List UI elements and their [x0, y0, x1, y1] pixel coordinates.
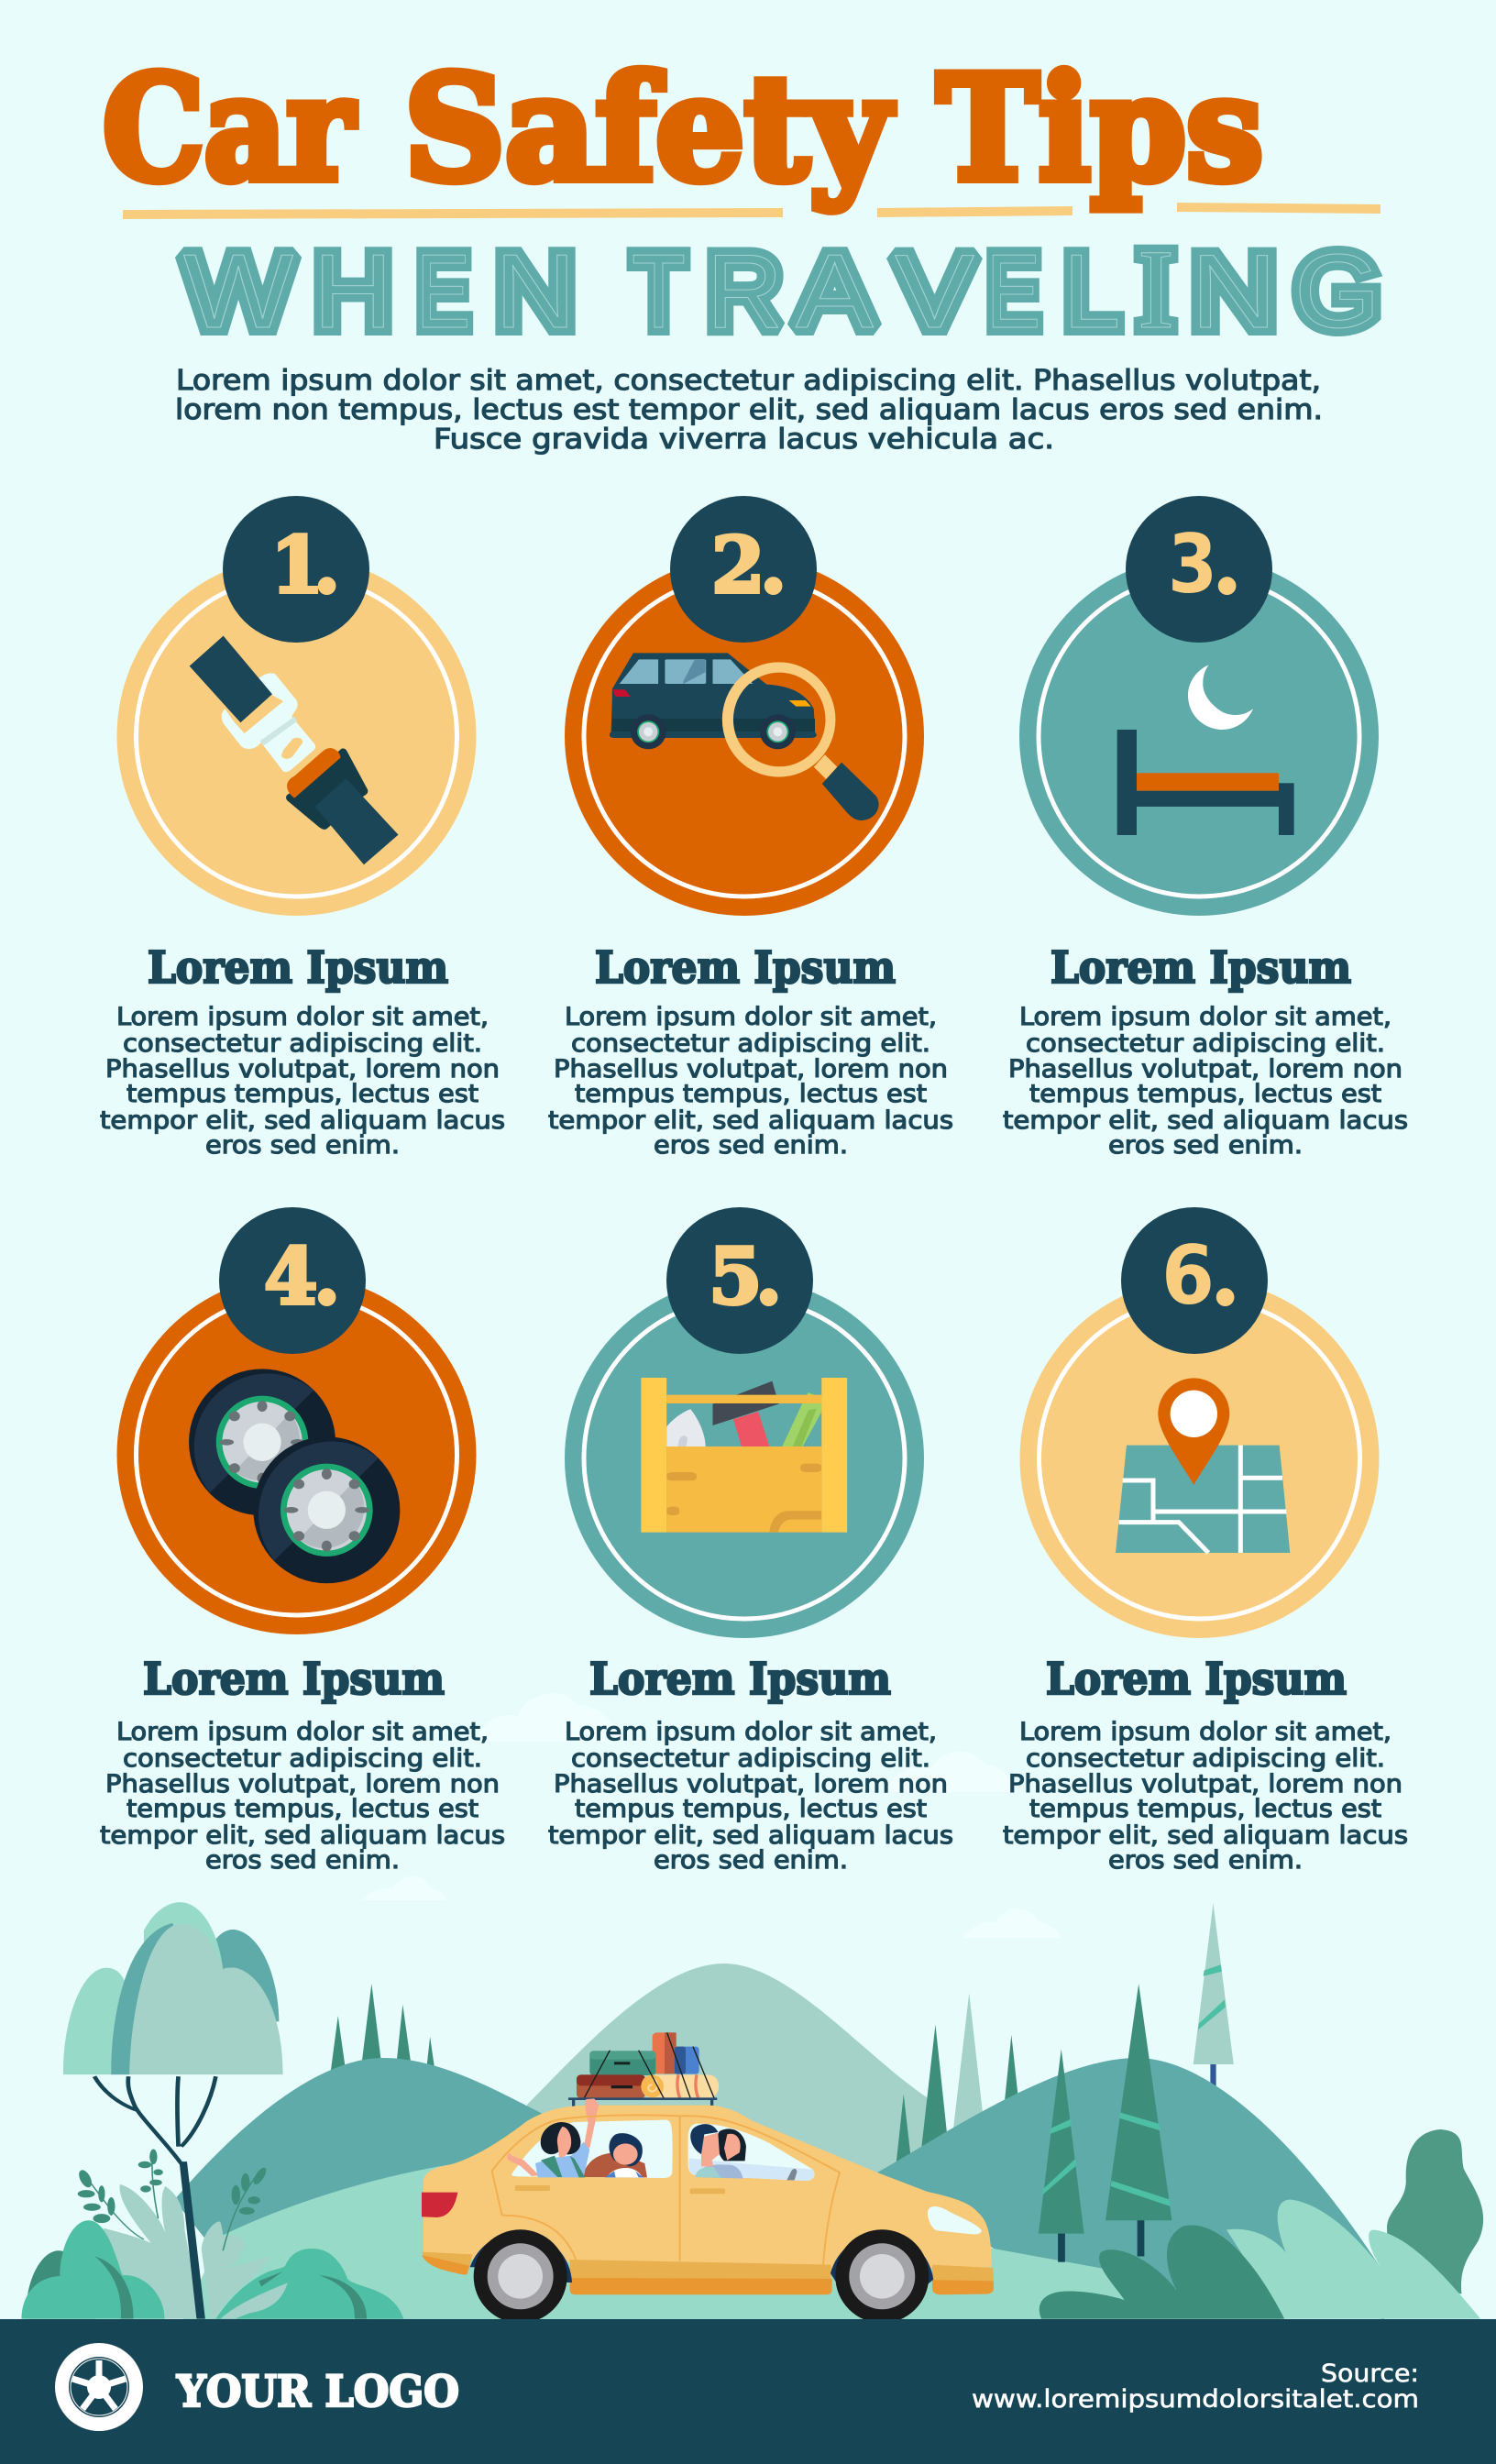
body text 5: Phasellus volutpat, lorem non: [554, 1770, 948, 1798]
background clouds: [362, 1693, 1061, 1938]
subtitle: WHEN TRAVELING: V: [895, 234, 974, 350]
body text 6: tempus tempus, lectus est: [1029, 1795, 1381, 1823]
rear wheel: [474, 2229, 567, 2323]
body text 3: consectetur adipiscing elit.: [1026, 1029, 1385, 1058]
logo wheel icon: [55, 2343, 143, 2431]
body text 6: Phasellus volutpat, lorem non: [1008, 1770, 1402, 1798]
subtitle: WHEN TRAVELING: L: [1063, 234, 1120, 350]
subtitle: WHEN TRAVELING: W: [183, 234, 293, 350]
intro text: [175, 365, 1323, 456]
number badge 6: [1121, 1207, 1268, 1354]
striped trees right: [1039, 1984, 1480, 2319]
body text 1: eros sed enim.: [205, 1131, 400, 1160]
heading 6: Lorem Ipsum: [1046, 1654, 1347, 1705]
subtitle: WHEN TRAVELING: N: [1191, 234, 1277, 350]
number badge 3: 3: [1168, 517, 1217, 611]
number badge 4: [219, 1207, 366, 1354]
body text 3: Lorem ipsum dolor sit amet,: [1019, 1003, 1392, 1031]
body text 2: [548, 1003, 953, 1160]
car with family: [422, 2032, 994, 2323]
car body: [424, 2106, 992, 2271]
heading 1: Lorem Ipsum: [148, 942, 448, 994]
heading 3: Lorem Ipsum: [1050, 942, 1351, 994]
subtitle: WHEN TRAVELING: H: [314, 234, 392, 350]
right hill: [877, 2058, 1384, 2319]
panel: tip 2 car check: [548, 496, 953, 1160]
body text 3: Phasellus volutpat, lorem non: [1008, 1055, 1402, 1084]
body text 4: tempor elit, sed aliquam lacus: [100, 1821, 505, 1850]
number badge 5: .: [755, 1231, 782, 1322]
front wheel: [835, 2229, 929, 2323]
body text 5: [548, 1718, 953, 1875]
heading 2: Lorem Ipsum: [595, 942, 896, 994]
title: Car Safety Tips: Tips: [937, 45, 1263, 214]
headlight: [928, 2206, 982, 2234]
door and trim lines: [492, 2115, 840, 2266]
subtitle: WHEN TRAVELING: A: [796, 234, 874, 350]
heading 5: Lorem Ipsum: [589, 1654, 891, 1705]
number badge 1: 1: [270, 520, 324, 610]
number badge 1: [223, 496, 369, 643]
subtitle: WHEN TRAVELING: H: [314, 234, 392, 350]
body text 2: Lorem ipsum dolor sit amet,: [565, 1003, 937, 1031]
body text 2: consectetur adipiscing elit.: [571, 1029, 930, 1058]
icon: bed and moon: [1117, 665, 1294, 835]
body text 5: tempor elit, sed aliquam lacus: [548, 1821, 953, 1850]
body text 6: Lorem ipsum dolor sit amet,: [1019, 1718, 1392, 1746]
footer bar: [0, 2319, 1496, 2464]
source text: [972, 2360, 1419, 2414]
body text 1: Phasellus volutpat, lorem non: [105, 1055, 500, 1084]
subtitle: WHEN TRAVELING: L: [1063, 234, 1120, 350]
subtitle: WHEN TRAVELING: W: [183, 234, 293, 350]
subtitle: WHEN TRAVELING: E: [416, 234, 470, 350]
subtitle: WHEN TRAVELING: T: [632, 234, 686, 350]
number badge 6: .: [1212, 1231, 1238, 1322]
intro text: Lorem ipsum dolor sit amet, consectetur adipiscing elit. Phasellus volutpat,: [176, 365, 1321, 397]
subtitle: WHEN TRAVELING: G: [1294, 234, 1380, 350]
source text: www.loremipsumdolorsitalet.com: [972, 2385, 1419, 2414]
number badge 4: 4: [264, 1231, 317, 1322]
left hill: [174, 2058, 550, 2246]
body text 4: [100, 1718, 505, 1875]
body text 6: [1003, 1718, 1408, 1875]
number badge 5: 5: [709, 1231, 762, 1322]
family in rear window: [507, 2098, 647, 2177]
subtitle: WHEN TRAVELING: E: [986, 234, 1040, 350]
body text 1: Lorem ipsum dolor sit amet,: [116, 1003, 489, 1031]
wheel arches: [470, 2232, 572, 2282]
title: Car Safety Tips: Car: [103, 45, 356, 214]
background conifers right: [896, 1903, 1234, 2169]
icon: car and magnifier: [610, 653, 879, 820]
body text 4: Lorem ipsum dolor sit amet,: [116, 1718, 489, 1746]
sills and bumpers: [570, 2260, 831, 2280]
subtitle: WHEN TRAVELING: V: [895, 234, 974, 350]
subtitle: WHEN TRAVELING: T: [632, 234, 686, 350]
windows: [512, 2120, 673, 2178]
number badge 2: 2: [711, 520, 764, 610]
subtitle: WHEN TRAVELING: R: [707, 234, 783, 350]
body text 5: consectetur adipiscing elit.: [571, 1744, 930, 1773]
source text: Source:: [1321, 2360, 1419, 2388]
subtitle: WHEN TRAVELING: I: [1138, 226, 1174, 352]
foreground ground: [183, 2163, 1283, 2319]
title: Car Safety Tips: Safety: [404, 45, 894, 214]
panel: tip 3 rest: [1003, 496, 1408, 1160]
logo text: YOUR LOGO: [176, 2367, 459, 2417]
body text 3: tempor elit, sed aliquam lacus: [1003, 1106, 1408, 1135]
subtitle: WHEN TRAVELING: R: [707, 234, 783, 350]
body text 4: tempus tempus, lectus est: [126, 1795, 478, 1823]
heading 4: Lorem Ipsum: [143, 1654, 445, 1705]
body text 5: eros sed enim.: [654, 1846, 848, 1875]
body text 1: tempus tempus, lectus est: [126, 1080, 478, 1108]
number badge 5: [666, 1207, 813, 1354]
icon: toolbox: [641, 1378, 847, 1533]
background conifers left: [331, 1984, 434, 2071]
left tree and bushes: [22, 1902, 403, 2319]
body text 2: tempor elit, sed aliquam lacus: [548, 1106, 953, 1135]
title: Car Safety Tips: [103, 45, 1263, 214]
subtitle: WHEN TRAVELING: [183, 226, 1380, 352]
body text 1: tempor elit, sed aliquam lacus: [100, 1106, 505, 1135]
landscape illustration: [22, 1902, 1483, 2323]
subtitle: WHEN TRAVELING: N: [1191, 234, 1277, 350]
body text 1: consectetur adipiscing elit.: [123, 1029, 482, 1058]
intro text: lorem non tempus, lectus est tempor elit, sed aliquam lacus eros sed enim.: [175, 394, 1323, 426]
icon: map and pin: [1116, 1378, 1290, 1553]
number badge 6: 6: [1161, 1228, 1215, 1323]
body text 6: consectetur adipiscing elit.: [1026, 1744, 1385, 1773]
body text 1: [100, 1003, 505, 1160]
body text 4: consectetur adipiscing elit.: [123, 1744, 482, 1773]
body text 3: tempus tempus, lectus est: [1029, 1080, 1381, 1108]
subtitle: WHEN TRAVELING: I: [1138, 226, 1174, 352]
panel: tip 6 map: [1003, 1207, 1408, 1875]
subtitle: WHEN TRAVELING: N: [495, 234, 576, 350]
number badge 4: .: [314, 1231, 340, 1322]
number badge 3: .: [1214, 520, 1240, 610]
panel: tip 5 toolbox: [548, 1207, 953, 1875]
number badge 2: .: [760, 520, 786, 610]
roof luggage: [568, 2032, 719, 2107]
body text 6: tempor elit, sed aliquam lacus: [1003, 1821, 1408, 1850]
body text 6: eros sed enim.: [1108, 1846, 1303, 1875]
number badge 3: [1126, 496, 1272, 643]
number badge 1: .: [314, 520, 340, 610]
body text 4: eros sed enim.: [205, 1846, 400, 1875]
right shrub: [1387, 2129, 1483, 2294]
body text 2: eros sed enim.: [654, 1131, 848, 1160]
panel: tip 4 tires: [100, 1207, 505, 1875]
number badge 2: [670, 496, 817, 643]
body text 5: Lorem ipsum dolor sit amet,: [565, 1718, 937, 1746]
body text 2: Phasellus volutpat, lorem non: [554, 1055, 948, 1084]
body text 4: Phasellus volutpat, lorem non: [105, 1770, 500, 1798]
subtitle: WHEN TRAVELING: G: [1294, 234, 1380, 350]
body text 5: tempus tempus, lectus est: [575, 1795, 927, 1823]
subtitle: WHEN TRAVELING: E: [416, 234, 470, 350]
body text 2: tempus tempus, lectus est: [575, 1080, 927, 1108]
icon: two tires: [189, 1369, 400, 1583]
family in front window: [690, 2124, 797, 2180]
subtitle: WHEN TRAVELING: A: [796, 234, 874, 350]
body text 3: eros sed enim.: [1108, 1131, 1303, 1160]
panel: tip 1 seatbelt: [100, 496, 505, 1160]
subtitle: WHEN TRAVELING: E: [986, 234, 1040, 350]
body text 3: [1003, 1003, 1408, 1160]
subtitle: WHEN TRAVELING: N: [495, 234, 576, 350]
back hill: [527, 1964, 944, 2218]
intro text: Fusce gravida viverra lacus vehicula ac.: [434, 424, 1054, 456]
taillight: [422, 2193, 457, 2217]
title underline strokes: [123, 203, 1380, 219]
icon: seatbelt: [190, 636, 399, 864]
